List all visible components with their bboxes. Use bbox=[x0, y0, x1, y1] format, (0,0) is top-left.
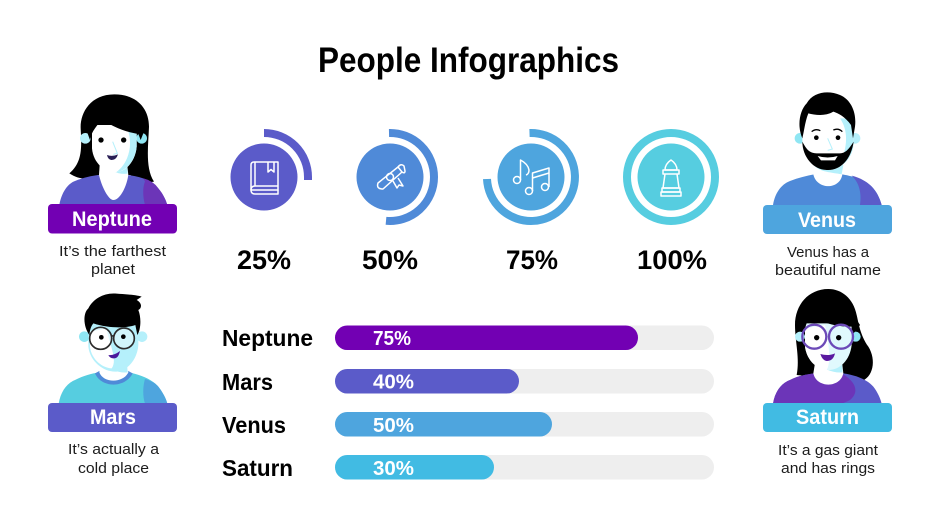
bar row: Saturn 30% bbox=[222, 455, 714, 481]
caption: It’s a gas giant bbox=[778, 443, 878, 459]
caption: It’s the farthest bbox=[59, 244, 166, 260]
bar row: Neptune 75% bbox=[222, 325, 714, 351]
title: People Infographics bbox=[318, 41, 619, 80]
name tag bbox=[48, 204, 177, 234]
name tag: Mars bbox=[90, 406, 136, 429]
radial gauge: 100% bbox=[627, 133, 715, 275]
progress arc bbox=[264, 133, 308, 180]
bar row: Saturn 30%: Saturn bbox=[222, 455, 293, 481]
illustration: woman with long black hair bbox=[59, 94, 167, 205]
caption: It’s actually a bbox=[68, 442, 160, 458]
name tag bbox=[48, 403, 177, 432]
caption bbox=[59, 244, 166, 278]
name tag: Neptune bbox=[72, 208, 152, 231]
name tag bbox=[763, 403, 892, 432]
value: 75% bbox=[506, 245, 558, 275]
illustration: bearded man bbox=[773, 92, 882, 205]
bar row: Venus 50% bbox=[222, 412, 714, 438]
caption bbox=[68, 442, 160, 477]
radial gauge: 50% bbox=[356, 133, 434, 275]
illustration: man with glasses bbox=[59, 293, 167, 404]
icon: book bbox=[230, 144, 298, 210]
caption: Venus has a bbox=[787, 245, 870, 261]
value: 25% bbox=[237, 245, 291, 275]
bar row: Mars 40%: 40% bbox=[373, 372, 414, 394]
bar row: Saturn 30%: 30% bbox=[373, 458, 414, 480]
caption: cold place bbox=[78, 461, 149, 477]
bar row: Mars 40%: Mars bbox=[222, 369, 273, 395]
name tag: Venus bbox=[798, 209, 856, 232]
value: 100% bbox=[637, 245, 707, 275]
bar row: Neptune 75%: Neptune bbox=[222, 325, 313, 351]
progress arc bbox=[386, 133, 434, 221]
caption bbox=[775, 245, 881, 279]
bar row: Neptune 75%: 75% bbox=[373, 328, 411, 350]
icon: chess piece bbox=[638, 144, 704, 210]
icon: music notes bbox=[498, 144, 564, 210]
bar row: Venus 50%: Venus bbox=[222, 412, 286, 438]
caption bbox=[778, 443, 878, 477]
radial gauge: 75% bbox=[487, 133, 575, 275]
bar row: Mars 40% bbox=[222, 369, 714, 395]
caption: planet bbox=[91, 262, 135, 278]
caption: beautiful name bbox=[775, 263, 881, 279]
value: 50% bbox=[362, 245, 418, 275]
panel: Neptune person bbox=[48, 94, 177, 278]
icon: diploma bbox=[356, 144, 424, 210]
progress arc bbox=[487, 133, 575, 221]
panel: Mars person bbox=[48, 293, 177, 477]
bar row: Venus 50%: 50% bbox=[373, 415, 414, 437]
radial gauge: 25% bbox=[230, 133, 308, 275]
panel: Saturn person bbox=[763, 289, 892, 477]
caption: and has rings bbox=[781, 461, 875, 477]
progress ring bbox=[627, 133, 715, 221]
name tag bbox=[763, 205, 892, 234]
illustration: woman with purple glasses bbox=[773, 289, 882, 404]
panel: Venus person bbox=[763, 92, 892, 279]
name tag: Saturn bbox=[796, 406, 859, 429]
